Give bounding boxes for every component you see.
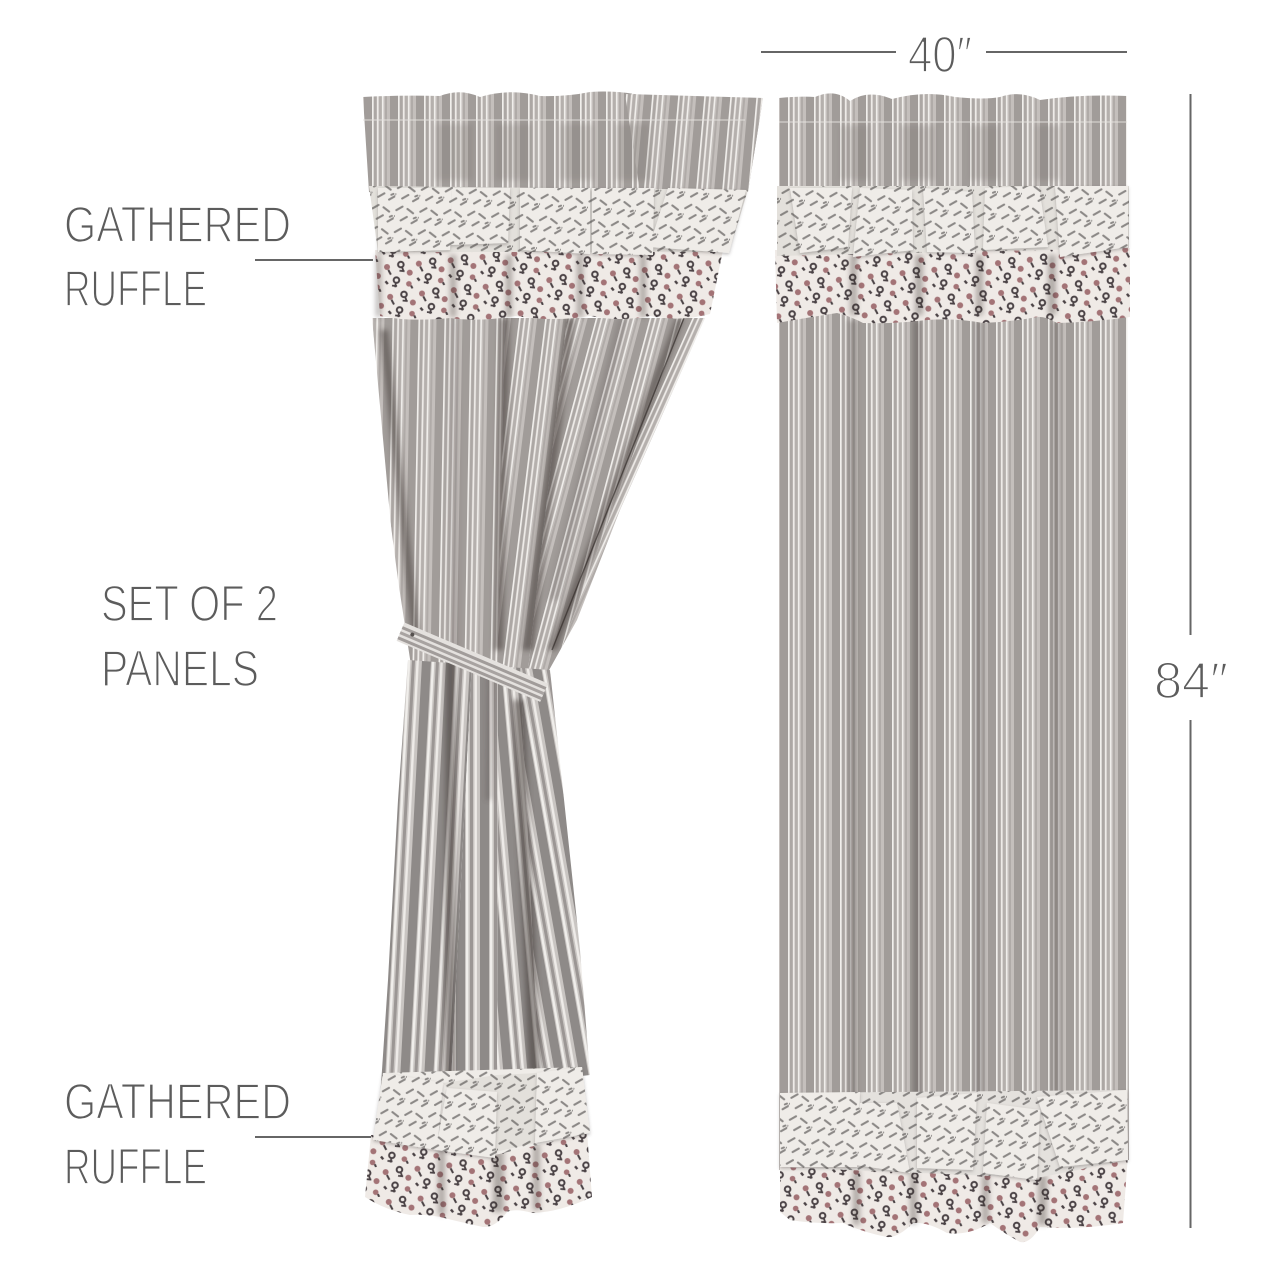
callout: top gathered ruffle bbox=[64, 196, 373, 317]
height dimension: 84 inches: 84″ bbox=[1154, 652, 1228, 709]
left curtain lower drape below tieback bbox=[375, 660, 600, 1102]
label: set of 2 panels bbox=[101, 575, 278, 697]
left curtain bottom leaf ruffle bbox=[373, 1067, 590, 1158]
callout: bottom gathered ruffle: RUFFLE bbox=[64, 1138, 207, 1195]
left curtain header band bbox=[363, 92, 763, 192]
right curtain striped body with folds bbox=[779, 88, 1129, 1173]
label: set of 2 panels: PANELS bbox=[101, 640, 259, 697]
right curtain bottom leaf ruffle bbox=[780, 1090, 1128, 1180]
width dimension: 40 inches: 40″ bbox=[908, 26, 972, 83]
left curtain top floral ruffle bbox=[375, 250, 723, 320]
right curtain top leaf ruffle bbox=[777, 186, 1129, 257]
right curtain top floral ruffle bbox=[775, 248, 1130, 323]
left curtain bottom floral ruffle bbox=[365, 1132, 592, 1227]
callout: top gathered ruffle: RUFFLE bbox=[64, 260, 207, 317]
fabric tieback band bbox=[397, 623, 548, 702]
right curtain panel (straight) bbox=[775, 88, 1130, 1242]
left curtain upper drape above tieback bbox=[372, 318, 710, 680]
callout: bottom gathered ruffle bbox=[64, 1073, 371, 1195]
left curtain panel (tied back) bbox=[363, 92, 763, 1227]
right curtain bottom floral ruffle bbox=[780, 1155, 1128, 1242]
left curtain top leaf ruffle bbox=[369, 186, 748, 255]
callout: bottom gathered ruffle: GATHERED bbox=[64, 1073, 291, 1130]
callout: top gathered ruffle: GATHERED bbox=[64, 196, 291, 253]
label: set of 2 panels: SET OF 2 bbox=[101, 575, 278, 632]
